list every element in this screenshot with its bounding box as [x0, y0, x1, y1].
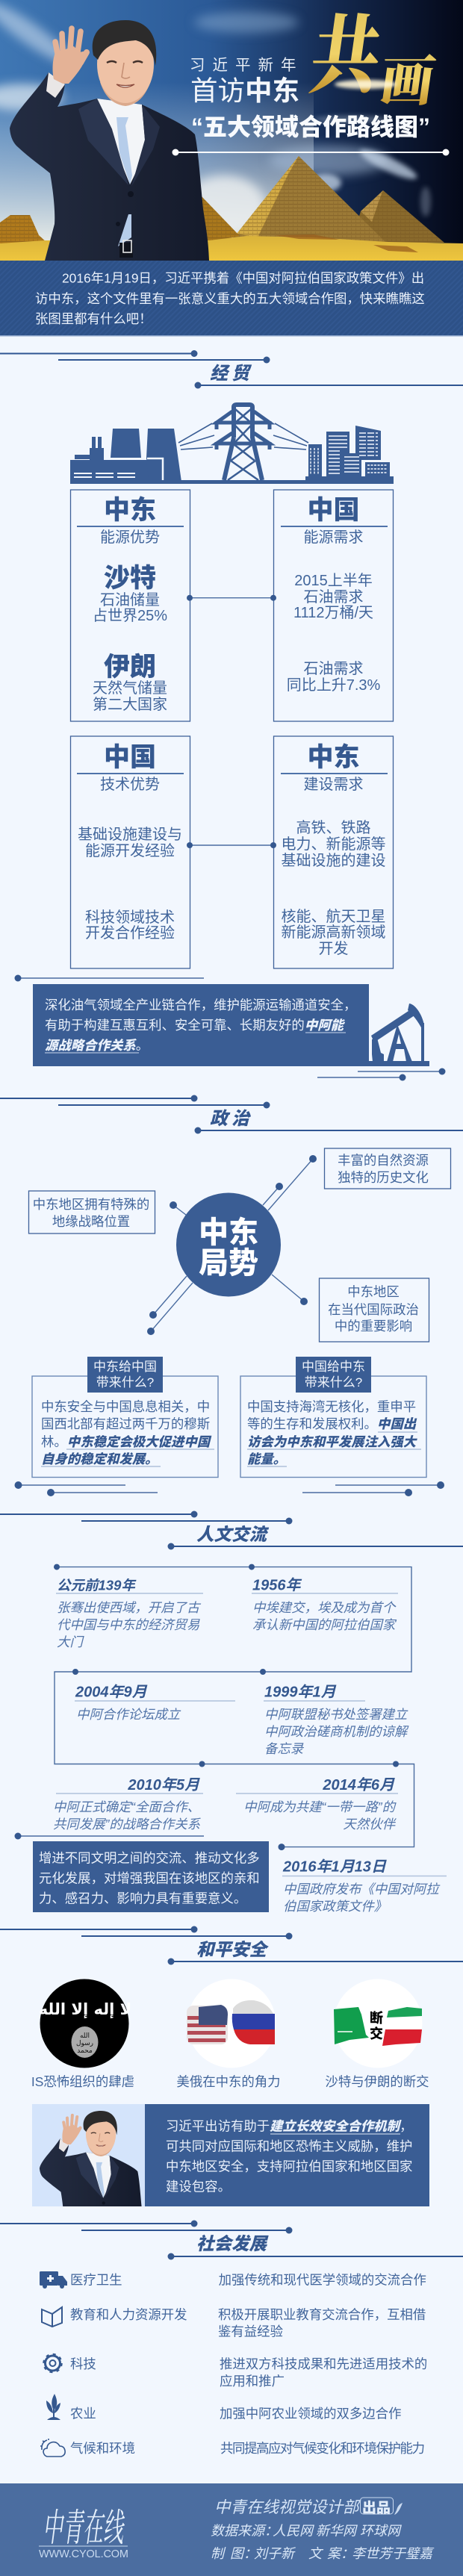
section heading: 和平安全: 和平安全	[196, 1940, 269, 1959]
timeline: 2014年6月: 2014年6月	[322, 1776, 395, 1793]
timeline: 1956年: 承认新中国的阿拉伯国家	[252, 1617, 397, 1632]
panel: 中国 技术优势: 技术优势	[100, 776, 160, 793]
timeline: 2010年5月: 2010年5月	[127, 1776, 200, 1793]
connectors around circle	[147, 1155, 317, 1335]
box: geostrategic position	[28, 1191, 155, 1233]
card: what the Middle East brings China: 林。中东稳定会极大促进中国	[41, 1434, 212, 1449]
panel: 中东 建设需求: 核能、航天卫星	[281, 908, 385, 925]
row: 农业: 加强中阿农业领域的双多边合作	[220, 2406, 401, 2421]
card: what China brings the Middle East: 中国给中东	[302, 1360, 365, 1374]
timeline: 1999年1月	[264, 1683, 409, 1756]
timeline: 公元前139年: 大门	[57, 1634, 84, 1649]
callout: energy partnership: 深化油气领域全产业链合作，维护能源运输通道安全，	[45, 998, 356, 1012]
captions: 美俄在中东的角力	[176, 2074, 281, 2089]
portrait	[39, 2111, 142, 2206]
connector	[187, 842, 276, 848]
section heading: 社会发展	[0, 2221, 463, 2259]
callout: energy partnership	[15, 975, 369, 1066]
icon: plant	[46, 2394, 60, 2420]
icon: Saudi and Iran break of relations: 交	[370, 2026, 383, 2041]
subtitle line one: 习近平新年	[190, 57, 303, 74]
timeline: 2010年5月: 共同发展”的战略合作关系	[53, 1817, 202, 1832]
box: natural resources: 独特的历史文化	[338, 1170, 429, 1185]
timeline: 公元前139年: 代中国与中东的经济贸易	[57, 1617, 200, 1632]
box: geostrategic position: 地缘战略位置	[52, 1214, 130, 1229]
bottom rules	[15, 1481, 444, 1496]
panel: 中国 技术优势: 科技领域技术	[85, 909, 175, 926]
credits: 人民网	[273, 2524, 314, 2539]
panel: 中东 能源优势: 中东	[104, 496, 156, 525]
gold calligraphy: 画	[376, 38, 441, 116]
timeline: 2014年6月: 中阿成为共建“一带一路”的	[243, 1799, 397, 1814]
gold calligraphy	[304, 0, 441, 116]
panel: 中东 能源优势: 第二大国家	[93, 696, 167, 713]
timeline: 2014年6月	[236, 1776, 398, 1832]
row: 农业: 农业	[70, 2406, 96, 2421]
icon: gear	[43, 2354, 61, 2372]
logo: WWW.CYOL.COM	[39, 2548, 128, 2560]
credits: 文	[308, 2546, 324, 2561]
title	[172, 0, 450, 155]
panel: 中东 能源优势: 占世界25%	[93, 607, 167, 624]
timeline: 1956年: 中埃建交，埃及成为首个	[252, 1600, 397, 1615]
row: 教育和人力资源开发: 鉴有益经验	[218, 2324, 283, 2339]
timeline: 2004年9月	[75, 1683, 235, 1722]
icon: oil pumpjack	[369, 1004, 429, 1066]
row: 气候和环境: 共同提高应对气候变化和环境保护能力	[220, 2441, 425, 2456]
row: 科技: 应用和推广	[220, 2374, 285, 2389]
panel: 中国 能源需求: 同比上升7.3%	[287, 676, 381, 694]
row: 教育和人力资源开发	[42, 2307, 426, 2339]
timeline: 2016年1月13日	[282, 1858, 447, 1914]
panel: 中东 能源优势	[70, 490, 190, 721]
connector	[187, 595, 276, 601]
panel: 中国 技术优势	[70, 736, 190, 968]
section heading: 经贸: 经贸	[210, 364, 253, 384]
central circle: 中东局势: 中东	[199, 1216, 258, 1249]
panel: security cooperation: 可共同对应国际和地区恐怖主义威胁，维护	[166, 2138, 412, 2153]
card: what the Middle East brings China	[32, 1357, 218, 1477]
timeline: 1956年: 1956年	[252, 1577, 302, 1593]
callout: cultural exchange: 力、感召力、影响力具有重要意义。	[39, 1891, 246, 1905]
timeline: 2010年5月	[53, 1776, 203, 1832]
panel: 中东 建设需求: 新能源高新领域	[281, 924, 385, 941]
panel: 中东 能源优势: 天然气储量	[93, 679, 167, 697]
credits: 环球网	[360, 2524, 402, 2539]
panel: security cooperation	[32, 2104, 429, 2206]
timeline: 2016年1月13日: 中国政府发布《中国对阿拉	[283, 1882, 441, 1897]
panel: security cooperation: 习近平出访有助于建立长效安全合作机制，	[166, 2119, 412, 2134]
intro band: 访中东，这个文件里有一张意义重大的五大领域合作图，快来瞧瞧这	[35, 291, 425, 306]
section heading: 政治: 政治	[210, 1109, 253, 1129]
panel: 中东 建设需求: 电力、新能源等	[281, 836, 385, 853]
credits: 数据来源：	[211, 2524, 278, 2539]
intro band: 2016年1月19日，习近平携着《中国对阿拉伯国家政策文件》出	[62, 270, 424, 285]
card: what the Middle East brings China: 国西北部有超过两千万的穆斯	[41, 1416, 210, 1431]
captions: 沙特与伊朗的断交	[325, 2074, 429, 2089]
card: what China brings the Middle East: 中国支持海湾无核化，重申平	[247, 1399, 416, 1414]
callout: cultural exchange	[15, 1832, 269, 1912]
panel: 中东 建设需求: 建设需求	[303, 776, 363, 793]
card: what China brings the Middle East: 带来什么?	[305, 1375, 362, 1390]
header banner	[0, 0, 463, 261]
panel: 中东 能源优势: 伊朗	[104, 653, 156, 682]
intro band: 张图里都有什么吧！	[35, 311, 152, 326]
panel: 中国 能源需求: 石油需求	[303, 660, 363, 677]
card: what the Middle East brings China: 中东给中国	[93, 1360, 157, 1374]
sand	[0, 236, 463, 261]
captions	[31, 2074, 429, 2089]
credits: 中青在线视觉设计部	[214, 2498, 361, 2516]
icon: IS flag: محمد	[77, 2047, 93, 2055]
box: natural resources: 丰富的自然资源	[338, 1153, 429, 1168]
subtitle line two: 首访中东	[190, 75, 299, 106]
timeline: 2016年1月13日: 伯国家政策文件》	[283, 1899, 387, 1914]
card: what the Middle East brings China: 自身的稳定和发展。	[41, 1452, 158, 1466]
panel: 中东 能源优势: 沙特	[104, 564, 156, 593]
box: international politics: 中的重要影响	[335, 1319, 412, 1334]
logo: 中青在线	[43, 2497, 125, 2552]
clouds	[0, 0, 388, 235]
box: geostrategic position: 中东地区拥有特殊的	[33, 1197, 149, 1212]
credits: 图：	[230, 2546, 257, 2561]
credits	[211, 2498, 435, 2561]
panel: 中国 能源需求: 2015上半年	[294, 572, 373, 589]
icon: IS flag: لا إله إلا الله	[39, 2000, 131, 2018]
intro band	[0, 261, 463, 336]
timeline: 1999年1月: 中阿联盟秘书处签署建立	[264, 1707, 408, 1722]
card: what China brings the Middle East: 访会为中东和平发展注入强大	[247, 1434, 418, 1449]
footer	[0, 2483, 463, 2576]
illustration: power plant, pylon and city	[70, 405, 394, 484]
credits: 于璧嘉	[392, 2546, 435, 2561]
panel: 中国 技术优势: 中国	[104, 743, 156, 772]
central circle: 中东局势	[176, 1193, 281, 1296]
card: what the Middle East brings China: 中东安全与中国息息相关，中	[41, 1399, 210, 1414]
icon: IS flag: الله	[80, 2032, 90, 2040]
icon: ambulance	[40, 2271, 67, 2289]
row: 教育和人力资源开发: 积极开展职业教育交流合作，互相借	[218, 2307, 426, 2322]
section heading: 和平安全	[0, 1926, 463, 1965]
main title: “五大领域合作路线图”	[191, 113, 430, 140]
panel: 中东 建设需求: 高铁、铁路	[296, 819, 370, 836]
panel: 中国 能源需求	[273, 490, 393, 721]
row: 医疗卫生: 加强传统和现代医学领域的交流合作	[219, 2273, 426, 2288]
timeline: 公元前139年: 张骞出使西域，开启了古	[57, 1600, 202, 1615]
title rule	[172, 149, 450, 155]
timeline: 1999年1月: 备忘录	[264, 1741, 305, 1756]
credits: 案：	[327, 2546, 354, 2561]
row: 教育和人力资源开发: 教育和人力资源开发	[70, 2307, 187, 2322]
panel: 中国 能源需求: 能源需求	[303, 529, 363, 546]
panel: 中东 建设需求	[273, 736, 393, 968]
credits: 新华网	[316, 2524, 358, 2539]
row: 科技: 推进双方科技成果和先进适用技术的	[220, 2356, 427, 2371]
panel: 中东 建设需求: 基础设施的建设	[281, 852, 385, 869]
person	[10, 20, 209, 261]
row: 气候和环境: 气候和环境	[70, 2441, 135, 2456]
timeline: 公元前139年: 公元前139年	[57, 1577, 137, 1593]
card: what China brings the Middle East: 等的生存和发展权利。中国出	[247, 1416, 417, 1431]
timeline: 2004年9月: 中阿合作论坛成立	[76, 1707, 181, 1722]
section heading: 经贸	[0, 350, 463, 388]
icon: US and Russia fists	[187, 1979, 276, 2068]
timeline: 2010年5月: 中阿正式确定“全面合作、	[53, 1799, 200, 1814]
timeline: 1999年1月: 1999年1月	[264, 1683, 337, 1701]
icon: Saudi and Iran break of relations	[333, 1979, 423, 2068]
panel: 中国 技术优势: 开发合作经验	[85, 924, 175, 942]
section heading: 人文交流	[0, 1511, 463, 1550]
panel: 中东 能源优势: 能源优势	[100, 529, 160, 546]
panel: 中东 建设需求: 中东	[307, 743, 360, 772]
timeline: 2016年1月13日: 2016年1月13日	[282, 1858, 387, 1876]
pyramids	[351, 190, 444, 243]
credits: 出品	[362, 2500, 391, 2516]
panel: 中国 技术优势: 能源开发经验	[85, 842, 175, 859]
icon: open book	[42, 2307, 62, 2327]
timeline: 2014年6月: 天然伙伴	[343, 1817, 397, 1832]
section heading: 人文交流: 人文交流	[196, 1525, 269, 1544]
credits: 刘子新	[254, 2546, 296, 2561]
panel: security cooperation: 中东地区安全，支持阿拉伯国家和地区国家	[166, 2159, 412, 2174]
row: 医疗卫生: 医疗卫生	[70, 2273, 122, 2288]
timeline: 1956年	[252, 1577, 398, 1632]
captions: IS恐怖组织的肆虐	[31, 2074, 134, 2089]
panel: 中国 能源需求: 1112万桶/天	[293, 604, 373, 621]
section heading: 政治	[0, 1095, 463, 1133]
central circle: 中东局势: 局势	[199, 1247, 258, 1280]
row: 气候和环境	[40, 2439, 425, 2457]
icon: cloud and sun	[40, 2439, 65, 2457]
callout: energy partnership: 源战略合作关系。	[45, 1038, 149, 1053]
panel: 中国 能源需求: 中国	[307, 496, 360, 525]
credits: 李世芳	[352, 2546, 394, 2561]
panel: 中东 能源优势: 石油储量	[100, 591, 160, 609]
card: what the Middle East brings China: 带来什么?	[96, 1375, 154, 1390]
row: 医疗卫生	[40, 2271, 426, 2289]
panel: security cooperation: 建设包容。	[166, 2179, 231, 2194]
icon: IS flag: رسول	[76, 2040, 93, 2047]
section heading: 社会发展: 社会发展	[196, 2234, 269, 2253]
callout: energy partnership: 有助于构建互惠互利、安全可靠、长期友好的中阿能	[45, 1018, 346, 1033]
box: natural resources	[324, 1148, 451, 1189]
timeline: 2004年9月: 2004年9月	[75, 1683, 148, 1701]
callout: cultural exchange: 增进不同文明之间的交流、推动文化多	[39, 1850, 260, 1865]
icon: Saudi and Iran break of relations: 断	[370, 2010, 383, 2026]
timeline: 1999年1月: 中阿政治磋商机制的谅解	[264, 1724, 409, 1739]
row: 农业	[46, 2394, 401, 2421]
card: what China brings the Middle East	[240, 1357, 426, 1477]
box: international politics	[320, 1278, 429, 1342]
timeline path	[54, 1564, 414, 1850]
box: international politics: 在当代国际政治	[328, 1302, 419, 1317]
panel: 中国 技术优势: 基础设施建设与	[78, 826, 182, 843]
credits: 制	[211, 2546, 226, 2561]
card: what China brings the Middle East: 能量。	[247, 1452, 286, 1466]
icon: IS flag	[39, 1979, 131, 2068]
row: 科技	[43, 2354, 427, 2389]
row: 科技: 科技	[70, 2356, 96, 2371]
callout: cultural exchange: 元化发展，对增强我国在该地区的亲和	[39, 1871, 260, 1886]
panel: 中东 建设需求: 开发	[318, 940, 348, 957]
panel: 中国 能源需求: 石油需求	[303, 588, 363, 606]
bottom rules	[317, 1068, 445, 1081]
timeline: 公元前139年	[56, 1577, 203, 1649]
box: international politics: 中东地区	[347, 1284, 400, 1299]
